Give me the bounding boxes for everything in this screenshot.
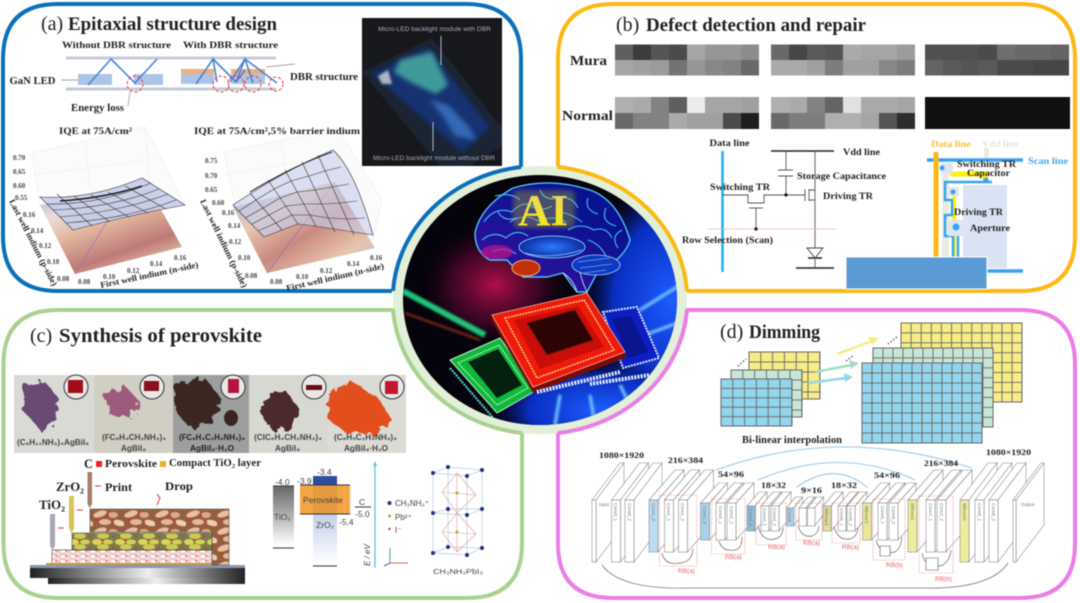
panel: synthesis of perovskite [4, 310, 522, 598]
diagram: encoder-decoder network: 18×32 [761, 480, 786, 490]
diagram: DBR structure comparison: Energy loss [71, 103, 124, 114]
diagram: CH3NH3PbI3 crystal structure: CH₃NH₃PbI₃ [433, 567, 483, 576]
chart: IQE at 75A/cm2 with 5% barrier indium surface: 0.75 [205, 157, 218, 165]
diagram: encoder-decoder network: 18×32 [831, 480, 857, 490]
diagram: encoder-decoder network: Conv2_0 [702, 506, 707, 525]
chart: IQE at 75A/cm2 surface: 0.65 [13, 168, 26, 176]
chart: IQE at 75A/cm2 with 5% barrier indium surface: 0.14 [228, 222, 241, 230]
row labels: Mura and Normal: Mura [570, 54, 607, 69]
chart: energy level diagram: C [359, 497, 365, 507]
photo strip: five perovskite samples: AgBiI₈ [121, 444, 146, 453]
diagram: encoder-decoder network: Conv2_2 [729, 506, 734, 525]
diagram: encoder-decoder network: Conv4 [787, 509, 792, 523]
photo strip: five perovskite samples: (C₆H₅C₂H₄NH₃)₄ [334, 433, 397, 442]
photo strip: five perovskite samples: (FC₆H₄C₂H₄NH₃)₄ [179, 433, 245, 442]
chart: IQE at 75A/cm2 with 5% barrier indium surface: 0.16 [222, 209, 235, 217]
diagram: DBR structure comparison: GaN LED [10, 76, 56, 87]
diagram: encoder-decoder network: Conv3_0 [748, 508, 753, 527]
diagram: bi-linear interpolation feature maps: Bi-linear interpolation [742, 435, 842, 446]
diagram: bi-linear interpolation feature maps [721, 323, 1022, 446]
chart: IQE at 75A/cm2 surface: 0.16 [23, 211, 36, 219]
heading: defect detection and repair: Defect detection and repair [646, 15, 867, 36]
photo strip: five perovskite samples [14, 375, 406, 453]
image grid: Normal samples [615, 97, 1070, 129]
chart: IQE at 75A/cm2 surface: IQE at 75A/cm² [59, 127, 132, 137]
heading: dimming: (d) [720, 321, 743, 343]
diagram: encoder-decoder network: Output [1021, 502, 1035, 507]
diagram: encoder-decoder network: 216×384 [668, 455, 704, 465]
chart: IQE at 75A/cm2 surface: 0.10 [47, 258, 60, 266]
circuit schematic: Vdd line [843, 147, 880, 157]
diagram: encoder-decoder network: 1080×1920 [986, 447, 1031, 457]
chart: energy level diagram: -5.0 [355, 509, 370, 519]
diagram: encoder-decoder network: Conv1_0 [651, 503, 656, 522]
circuit schematic: Row Selection (Scan) [682, 235, 773, 245]
diagram: encoder-decoder network: Input [599, 502, 610, 507]
row labels: Mura and Normal [562, 54, 613, 124]
diagram: encoder-decoder network: Conv7_2 [939, 503, 944, 522]
heading: synthesis of perovskite: (c) [30, 325, 52, 347]
pixel layout diagram: Scan line [1028, 156, 1068, 166]
diagram: encoder-decoder network: Conv1_1 [666, 503, 671, 522]
diagram: encoder-decoder network: RB(b) [935, 576, 952, 583]
diagram: encoder-decoder network: Bilinear2 [864, 506, 869, 524]
photo strip: five perovskite samples: AgBiI₈·H₂O [190, 444, 234, 453]
chart: IQE at 75A/cm2 surface: 0.70 [13, 154, 26, 162]
chart: IQE at 75A/cm2 with 5% barrier indium surface: 0.12 [320, 267, 333, 275]
pixel layout diagram [927, 139, 1068, 271]
diagram: encoder-decoder network: Conv3_2 [772, 508, 777, 527]
chart: energy level diagram: ZrO₂ [316, 520, 334, 530]
diagram: printed perovskite layer stack: Print [105, 480, 132, 494]
pixel layout diagram: Driving TR [954, 207, 1004, 217]
chart: IQE at 75A/cm2 with 5% barrier indium surface: 0.10 [238, 254, 251, 262]
heading: defect detection and repair: (b) [616, 14, 639, 36]
circuit schematic: Storage Capacitance [797, 171, 886, 181]
diagram: encoder-decoder network: Conv0_2 [627, 503, 632, 522]
diagram: encoder-decoder network: Conv8_1 [977, 503, 982, 522]
diagram: encoder-decoder network: Bilinear0 [962, 503, 967, 521]
diagram: encoder-decoder network: RB(b) [886, 562, 903, 569]
diagram: printed perovskite layer stack: C [84, 456, 93, 471]
pixel layout diagram: Capacitor [967, 168, 1010, 178]
chart: IQE at 75A/cm2 with 5% barrier indium surface: 0.10 [296, 273, 309, 281]
chart: IQE at 75A/cm2 with 5% barrier indium surface: 0.60 [212, 199, 225, 207]
diagram: encoder-decoder network: Conv3_1 [762, 508, 767, 527]
chart: IQE at 75A/cm2 with 5% barrier indium surface: 0.65 [205, 186, 218, 194]
chart: IQE at 75A/cm2 surface: First well indium (n-side) [99, 259, 199, 290]
photo strip: five perovskite samples: AgBiI₈·H₂O [344, 444, 388, 453]
chart: energy level diagram: Perovskite [303, 495, 343, 505]
diagram: encoder-decoder network: Conv5_1 [839, 508, 844, 527]
diagram: encoder-decoder network: 1080×1920 [599, 450, 644, 460]
heading: dimming [720, 321, 820, 343]
diagram: encoder-decoder network: RB(a) [842, 544, 859, 551]
image grid: Mura samples [615, 44, 1069, 76]
circuit schematic [682, 138, 886, 272]
chart: IQE at 75A/cm2 with 5% barrier indium surface: First well indium (n-side) [285, 261, 385, 293]
diagram: encoder-decoder network: 54×96 [874, 470, 900, 480]
chart: IQE at 75A/cm2 surface: 0.16 [174, 254, 187, 262]
diagram: encoder-decoder network: Conv0_1 [613, 503, 618, 522]
chart: IQE at 75A/cm2 surface: 0.10 [103, 273, 116, 281]
chart: energy level diagram [273, 461, 377, 568]
diagram: CH3NH3PbI3 crystal structure: CH₃NH₃⁺ [395, 499, 429, 508]
diagram: CH3NH3PbI3 crystal structure: Pb²⁺ [395, 513, 412, 522]
diagram: DBR structure comparison: With DBR structure [183, 41, 278, 51]
chart: IQE at 75A/cm2 with 5% barrier indium surface: 0.14 [347, 260, 360, 268]
chart: IQE at 75A/cm2 surface: 0.60 [13, 182, 26, 190]
icon: red chip [492, 293, 625, 393]
chart: IQE at 75A/cm2 with 5% barrier indium surface: 0.08 [245, 272, 258, 280]
chart: IQE at 75A/cm2 with 5% barrier indium surface: 0.16 [370, 254, 383, 262]
diagram: encoder-decoder network: RB(a) [725, 554, 742, 561]
chart: IQE at 75A/cm2 with 5% barrier indium surface: 0.70 [205, 172, 218, 180]
diagram: encoder-decoder network: Conv5_2 [848, 508, 853, 527]
row labels: Mura and Normal: Normal [562, 109, 613, 124]
diagram: printed perovskite layer stack: Drop [165, 479, 193, 493]
heading: epitaxial structure design: (a) [41, 13, 63, 35]
chart: IQE at 75A/cm2 surface: 0.14 [31, 227, 44, 235]
chart: IQE at 75A/cm2 with 5% barrier indium surface: IQE at 75A/cm²,5% barrier indium [194, 127, 360, 137]
diagram: printed perovskite layer stack: ZrO₂ [56, 479, 84, 494]
chart: IQE at 75A/cm2 surface: Last well indium (p-side) [7, 197, 60, 288]
diagram: encoder-decoder network: Bilinear3 [824, 508, 829, 526]
circuit schematic: Driving TR [823, 191, 874, 201]
pixel layout diagram: Aperture [970, 223, 1010, 233]
photo strip: five perovskite samples: (FC₆H₄CH₂NH₃)₄ [102, 433, 166, 442]
diagram: printed perovskite layer stack: Compact TiO₂ layer [169, 458, 262, 469]
chart: IQE at 75A/cm2 with 5% barrier indium surface: Last well indium (p-side) [198, 197, 250, 289]
diagram: encoder-decoder network: RB(a) [803, 540, 820, 547]
chart: IQE at 75A/cm2 surface: 0.12 [39, 242, 52, 250]
heading: dimming: Dimming [749, 322, 820, 343]
heading: epitaxial structure design: Epitaxial structure design [68, 14, 277, 35]
circuit schematic: Switching TR [710, 182, 771, 192]
heading: synthesis of perovskite: Synthesis of perovskite [59, 325, 262, 347]
chart: energy level diagram: -5.4 [339, 517, 354, 527]
diagram: encoder-decoder network: Bilinear1 [910, 503, 915, 521]
chart: IQE at 75A/cm2 surface: 0.08 [78, 278, 91, 286]
diagram: DBR structure comparison: DBR structure [290, 72, 359, 83]
photo strip: five perovskite samples: (C₆H₁₁NH₃)₄AgBiI₈ [17, 438, 89, 447]
photo: micro-LED backlight module: Micro-LED backlight module without DBR [373, 156, 496, 162]
diagram: encoder-decoder network: 9×16 [801, 485, 822, 495]
photo strip: five perovskite samples: (ClC₆H₄CH₂NH₃)₄ [254, 433, 322, 442]
icon: blue chip [590, 307, 659, 384]
chart: energy level diagram: TiO₂ [274, 512, 291, 522]
diagram: CH3NH3PbI3 crystal structure [384, 465, 484, 576]
diagram: encoder-decoder network: Conv6_2 [891, 506, 896, 525]
circuit schematic: Data line [710, 138, 750, 148]
blue cover rectangle [846, 257, 987, 289]
diagram: CH3NH3PbI3 crystal structure: I⁻ [395, 526, 401, 535]
diagram: encoder-decoder network: Conv1_2 [680, 503, 685, 522]
icon: brain [475, 183, 630, 292]
center badge: AI brain and chips [390, 164, 690, 436]
chart: IQE at 75A/cm2 surface: 0.14 [150, 260, 163, 268]
diagram: printed perovskite layer stack: TiO₂ [39, 497, 65, 512]
chart: IQE at 75A/cm2 with 5% barrier indium surface [194, 127, 385, 293]
chart: IQE at 75A/cm2 surface: 0.08 [57, 275, 70, 283]
diagram: encoder-decoder network: 216×384 [924, 458, 959, 468]
panel: epitaxial structure design [3, 4, 521, 293]
icon: green chip [450, 338, 537, 420]
photo strip: five perovskite samples: AgBiI₈ [275, 444, 300, 453]
chart: IQE at 75A/cm2 with 5% barrier indium surface: 0.12 [229, 238, 242, 246]
diagram: encoder-decoder network: Conv6_1 [880, 506, 885, 525]
panel: dimming [558, 310, 1075, 598]
chart: IQE at 75A/cm2 surface: 0.55 [15, 194, 28, 202]
diagram: printed perovskite layer stack: Perovskite [105, 459, 158, 470]
chart: IQE at 75A/cm2 surface [7, 127, 199, 290]
diagram: printed perovskite layer stack [30, 456, 262, 584]
diagram: encoder-decoder network: 54×96 [718, 469, 744, 479]
chart: energy level diagram: E / eV [363, 544, 372, 566]
chart: energy level diagram: -3.4 [317, 467, 332, 477]
pixel layout diagram: Data line [931, 139, 971, 149]
panel: defect detection and repair [558, 4, 1075, 291]
photo: micro-LED backlight module [362, 18, 502, 166]
chart: IQE at 75A/cm2 surface: 0.12 [127, 267, 140, 275]
pixel layout diagram: Vdd line [982, 139, 1019, 149]
diagram: DBR structure comparison [10, 41, 359, 114]
chart: IQE at 75A/cm2 with 5% barrier indium surface: 0.08 [270, 278, 283, 286]
diagram: encoder-decoder network: Conv2_1 [718, 506, 723, 525]
label: AI: AI [518, 186, 568, 235]
photo: micro-LED backlight module: Micro-LED backlight module with DBR [378, 27, 492, 33]
chart: energy level diagram: -4.0 [275, 477, 290, 487]
pixel layout diagram: Switching TR [957, 159, 1017, 169]
diagram: encoder-decoder network: Conv7_1 [928, 503, 933, 522]
diagram: encoder-decoder network: RB(a) [678, 568, 695, 575]
diagram: encoder-decoder network [592, 447, 1044, 588]
diagram: DBR structure comparison: Without DBR structure [62, 41, 171, 51]
diagram: encoder-decoder network: Conv8_2 [991, 503, 996, 522]
diagram: encoder-decoder network: RB(a) [768, 544, 785, 551]
chart: energy level diagram: -3.9 [297, 476, 312, 486]
